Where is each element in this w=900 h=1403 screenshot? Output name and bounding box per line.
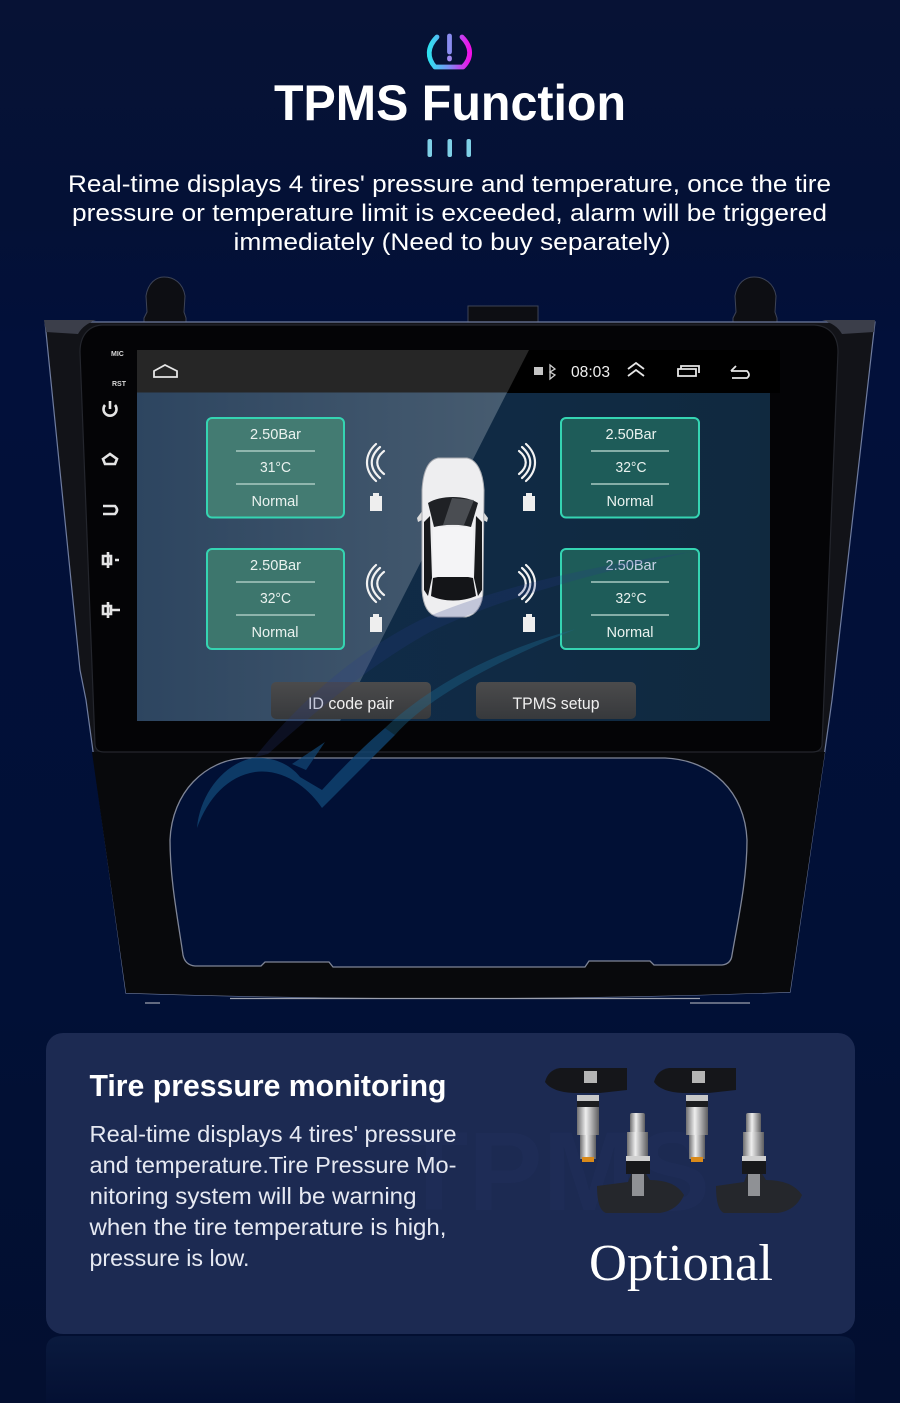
car head unit: [44, 277, 875, 1003]
tire card: front right: [561, 418, 699, 518]
tire card: rear right: Normal: [606, 624, 654, 641]
glass reflection: [137, 392, 507, 721]
status bar icons: [154, 363, 749, 378]
button: TPMS setup: TPMS setup: [512, 694, 600, 713]
tire card: front left: 31°C: [260, 459, 291, 476]
panel body text: pressure is low.: [90, 1245, 250, 1271]
bezel frame: [45, 322, 875, 998]
tire card: front right: 2.50Bar: [606, 426, 656, 443]
side button labels: MIC: [111, 351, 124, 358]
tire card: rear left: 2.50Bar: [250, 557, 301, 574]
tire card: rear right: [561, 549, 699, 649]
signal waves and battery icons: [367, 444, 535, 632]
panel body text: and temperature.Tire Pressure Mo-: [90, 1152, 457, 1178]
button: ID code pair: [271, 682, 431, 719]
sensor: top left: [545, 1068, 627, 1162]
button: ID code pair: ID code pair: [308, 694, 394, 713]
title: TPMS Function: [274, 75, 626, 131]
button: TPMS setup: [476, 682, 636, 719]
tire card: front left: [207, 418, 344, 518]
icon: tire pressure warning: [429, 36, 470, 67]
tire card: front left: Normal: [252, 493, 298, 510]
status bar signal icons: [534, 365, 555, 379]
tire card: rear right: 2.50Bar: [606, 557, 656, 574]
panel body text: when the tire temperature is high,: [88, 1214, 447, 1240]
intro text: immediately (Need to buy separately): [234, 229, 670, 256]
side button icons: [103, 401, 120, 618]
tire card: rear right: 32°C: [616, 590, 647, 607]
tire card: front right: 32°C: [616, 459, 647, 476]
decorative ticks: [428, 139, 471, 157]
side button labels: [111, 351, 127, 388]
panel: tire pressure monitoring: [46, 1033, 855, 1334]
side button labels: RST: [112, 381, 127, 388]
white car top view: [417, 458, 488, 617]
tire card: rear left: [207, 549, 344, 649]
optional label: Optional: [589, 1235, 773, 1292]
panel body text: Real-time displays 4 tires' pressure: [90, 1121, 456, 1147]
intro text: Real-time displays 4 tires' pressure and temperature, once the tire: [68, 171, 831, 198]
sensor: bottom right: [716, 1113, 802, 1213]
tire card: front left: 2.50Bar: [250, 426, 301, 443]
panel reflection: [46, 1336, 855, 1403]
status bar reflection: [137, 350, 529, 393]
sensor: bottom left: [597, 1113, 684, 1213]
tire card: rear left: 32°C: [260, 590, 291, 607]
top trim highlight: [44, 320, 875, 334]
status bar: [137, 350, 780, 393]
intro text: pressure or temperature limit is exceeded, alarm will be triggered: [72, 200, 827, 227]
watermark logo: [197, 552, 690, 828]
tire card: rear left: Normal: [252, 624, 298, 641]
inner black display bezel: [80, 325, 838, 752]
intro text: [68, 171, 831, 256]
climate panel cutout: [170, 758, 747, 967]
screen: [137, 350, 780, 721]
panel heading: Tire pressure monitoring: [90, 1069, 446, 1103]
sensor: top right: [654, 1068, 736, 1162]
panel body text: [88, 1121, 457, 1271]
faint watermark: TPMS: [400, 1109, 710, 1234]
mounting tabs: [144, 277, 777, 323]
clock: 08:03: [571, 364, 610, 381]
bottom edge highlights: [145, 998, 750, 1003]
panel body text: nitoring system will be warning: [90, 1183, 416, 1209]
lower frame: [92, 752, 825, 998]
tire card: front right: Normal: [606, 493, 654, 510]
